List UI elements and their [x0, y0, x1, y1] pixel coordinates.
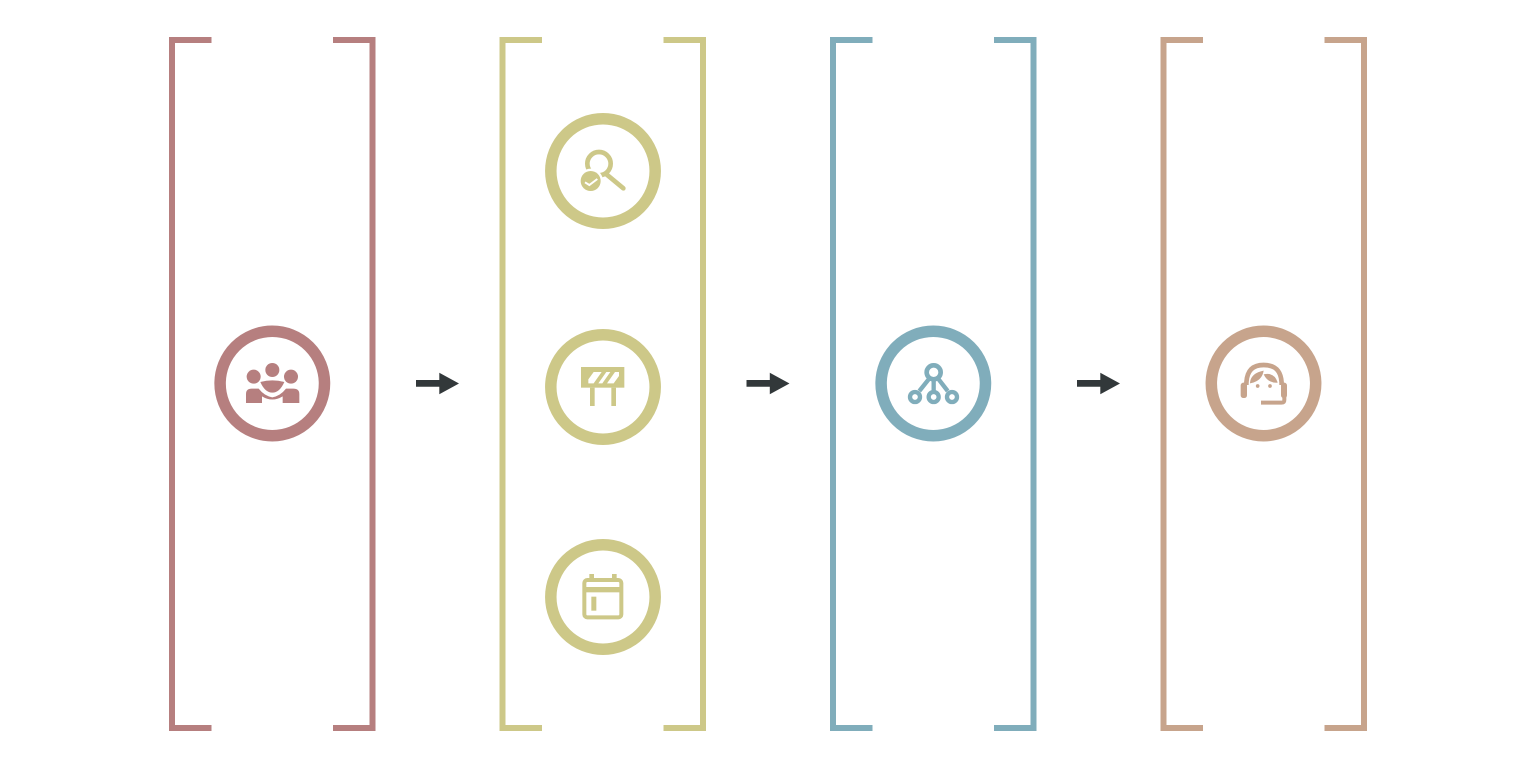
icon: network hierarchy in ring: [881, 331, 986, 436]
bracket: stage 1: [172, 40, 372, 728]
bracket: stage 2: [502, 40, 703, 728]
panel: stage 1: [172, 40, 372, 728]
icon: road barrier in ring: [551, 335, 655, 439]
panel: stage 3: [833, 40, 1034, 728]
icon: magnifier with check in ring: [551, 119, 655, 223]
icon: meeting group in ring: [220, 331, 324, 436]
bracket: stage 4: [1164, 40, 1364, 728]
panel: stage 2: [502, 40, 703, 728]
bracket: stage 3: [833, 40, 1034, 728]
arrow: stage 2 to 3: [746, 373, 790, 394]
arrow: stage 3 to 4: [1077, 373, 1120, 394]
arrow: stage 1 to 2: [416, 373, 459, 394]
icon: calendar in ring: [551, 545, 655, 649]
panel: stage 4: [1164, 40, 1364, 728]
icon: support agent headset in ring: [1211, 331, 1316, 436]
